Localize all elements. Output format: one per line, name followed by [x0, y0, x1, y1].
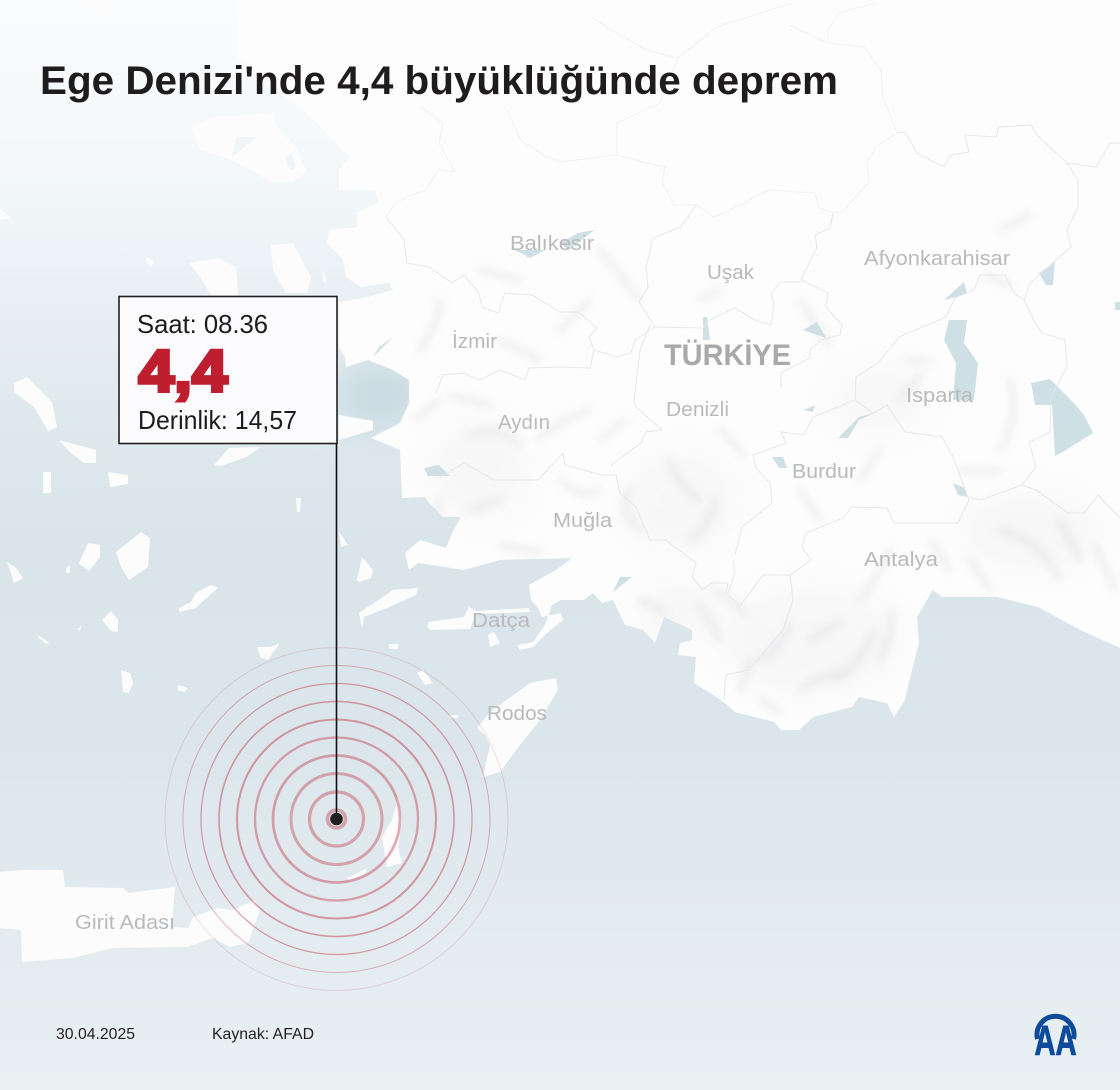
map: mainland Türkiye [327, 147, 1120, 730]
label: Aydın: Aydın [498, 412, 550, 434]
title: Ege Denizi'nde 4,4 büyüklüğünde deprem [40, 59, 838, 103]
callout leader line [336, 444, 337, 819]
label: Datça: Datça [472, 610, 531, 632]
icon: AA logo [1034, 1016, 1076, 1064]
label: Afyonkarahisar: Afyonkarahisar [864, 248, 1010, 270]
callout: time: Saat: 08.36 [137, 309, 268, 339]
label: Isparta: Isparta [906, 385, 974, 407]
label: Denizli: Denizli [666, 399, 729, 421]
map: province borders [386, 125, 1120, 700]
map: faint northern borders [386, 3, 897, 217]
label: Rodos: Rodos [487, 703, 547, 725]
label: İzmir: İzmir [452, 330, 497, 353]
label: Balıkesir: Balıkesir [510, 233, 594, 255]
map: terrain shading [415, 215, 1115, 712]
label: Uşak: Uşak [707, 262, 755, 284]
epicentre dot [330, 813, 343, 825]
label: TÜRKİYE: TÜRKİYE [664, 339, 791, 372]
footer: date: 30.04.2025 [56, 1026, 135, 1043]
map: lakes [232, 137, 1120, 592]
earthquake epicentre rings [165, 648, 508, 990]
label: Burdur: Burdur [792, 461, 856, 483]
map: islands [0, 0, 558, 962]
footer: source: Kaynak: AFAD [212, 1026, 314, 1043]
label: Muğla: Muğla [553, 510, 613, 532]
callout: magnitude: 4,4 [138, 338, 228, 404]
map: broad terrain tone [430, 365, 1100, 695]
callout: depth: Derinlik: 14,57 [138, 405, 297, 435]
icon: AA logo: AA [1034, 1017, 1076, 1064]
label: Girit Adası: Girit Adası [75, 912, 175, 934]
callout box [119, 296, 337, 444]
map labels [75, 233, 1010, 934]
label: Antalya: Antalya [864, 549, 939, 571]
